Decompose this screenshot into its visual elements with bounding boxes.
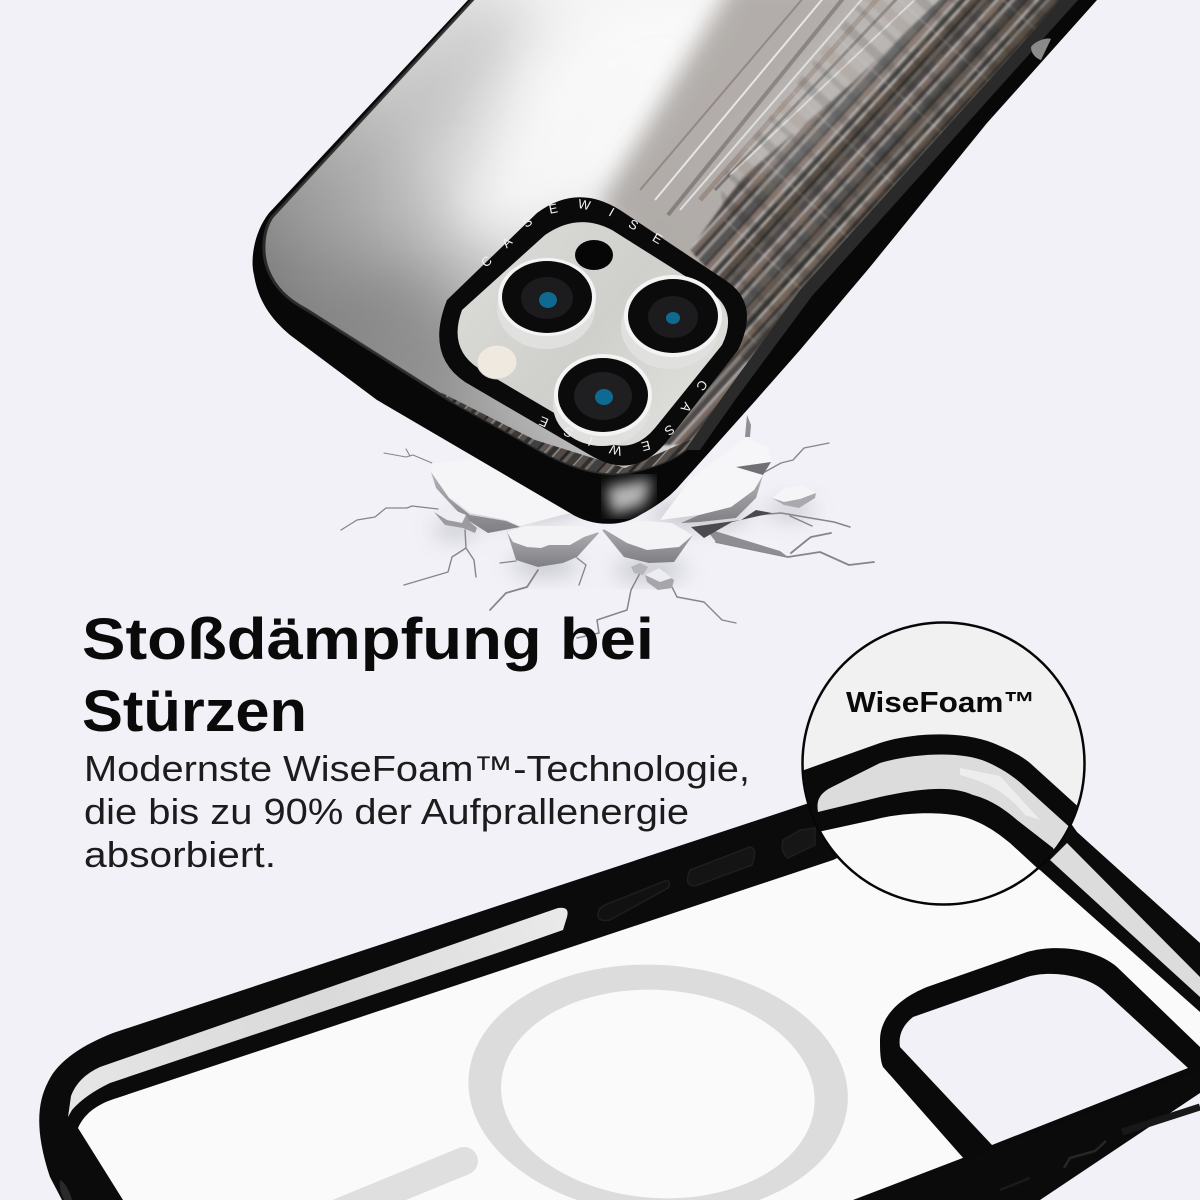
glossy bottom highlight [606, 478, 652, 515]
MagSafe ring [460, 952, 856, 1200]
illustration: cracked ground [341, 415, 874, 638]
right chunk side [681, 475, 763, 523]
case black outer body [253, 0, 1097, 524]
magnifier label: WiseFoam™ [846, 687, 1035, 719]
right chunk top surface [660, 438, 771, 520]
small rocks [434, 485, 816, 590]
camera bumper ring [439, 197, 747, 466]
right fault wedge [705, 528, 788, 557]
fine fade streaks [640, 0, 925, 215]
heading: Stoßdämpfung bei [82, 607, 654, 672]
image streaks and texture [280, 0, 1078, 490]
body text: Modernste WiseFoam™-Technologie, [84, 748, 750, 789]
right edge side button [1031, 38, 1051, 60]
crack lines [341, 443, 874, 638]
centre-right chunk [602, 520, 693, 563]
crack shadows [433, 489, 814, 580]
lens 2 [621, 275, 722, 369]
camera cutout frame [880, 948, 1200, 1160]
case black frame [39, 737, 1200, 1200]
magnifier callout: WiseFoam [801, 621, 1086, 906]
right edge dark band [685, 0, 1078, 450]
lens 3 [553, 354, 652, 446]
heading: Stürzen [82, 679, 307, 744]
dark wood texture [655, 0, 1070, 445]
broad dark streaks [705, 0, 1078, 360]
body text: absorbiert. [84, 834, 276, 875]
microphone hole [575, 240, 613, 270]
back image panel [264, 0, 1066, 473]
flash [477, 345, 517, 379]
heading [82, 607, 654, 744]
clear case, lower part [39, 737, 1200, 1200]
magnifier outline [802, 622, 1084, 904]
centre-left chunk [507, 526, 599, 567]
top spike [745, 415, 751, 437]
right side gap [1050, 843, 1200, 997]
dark triangle crack [736, 462, 771, 475]
body text [84, 748, 750, 875]
dark crack gap [691, 510, 772, 538]
phone with wood-look case [252, 0, 1097, 524]
lighter wood haze [730, 0, 960, 190]
wood strip under ring [441, 392, 692, 474]
lens 1 [497, 258, 596, 349]
bottom left port [60, 1180, 72, 1200]
MagSafe tab [340, 1161, 464, 1200]
camera cutout [900, 974, 1188, 1145]
ring text top: CASEWISE [482, 199, 663, 266]
left chunk side [431, 472, 520, 533]
camera plate [458, 222, 728, 446]
ring text bottom: CASEWISE [538, 381, 706, 456]
transparent back panel [78, 815, 1200, 1200]
volume buttons [598, 828, 815, 920]
soft fade toward wood [594, 0, 941, 270]
left side gap [68, 908, 568, 1117]
left chunk top surface [431, 455, 570, 526]
magnifier content [804, 734, 1077, 904]
body text: die bis zu 90% der Aufprallenergie [84, 791, 689, 832]
bottom band details [1000, 1107, 1200, 1190]
